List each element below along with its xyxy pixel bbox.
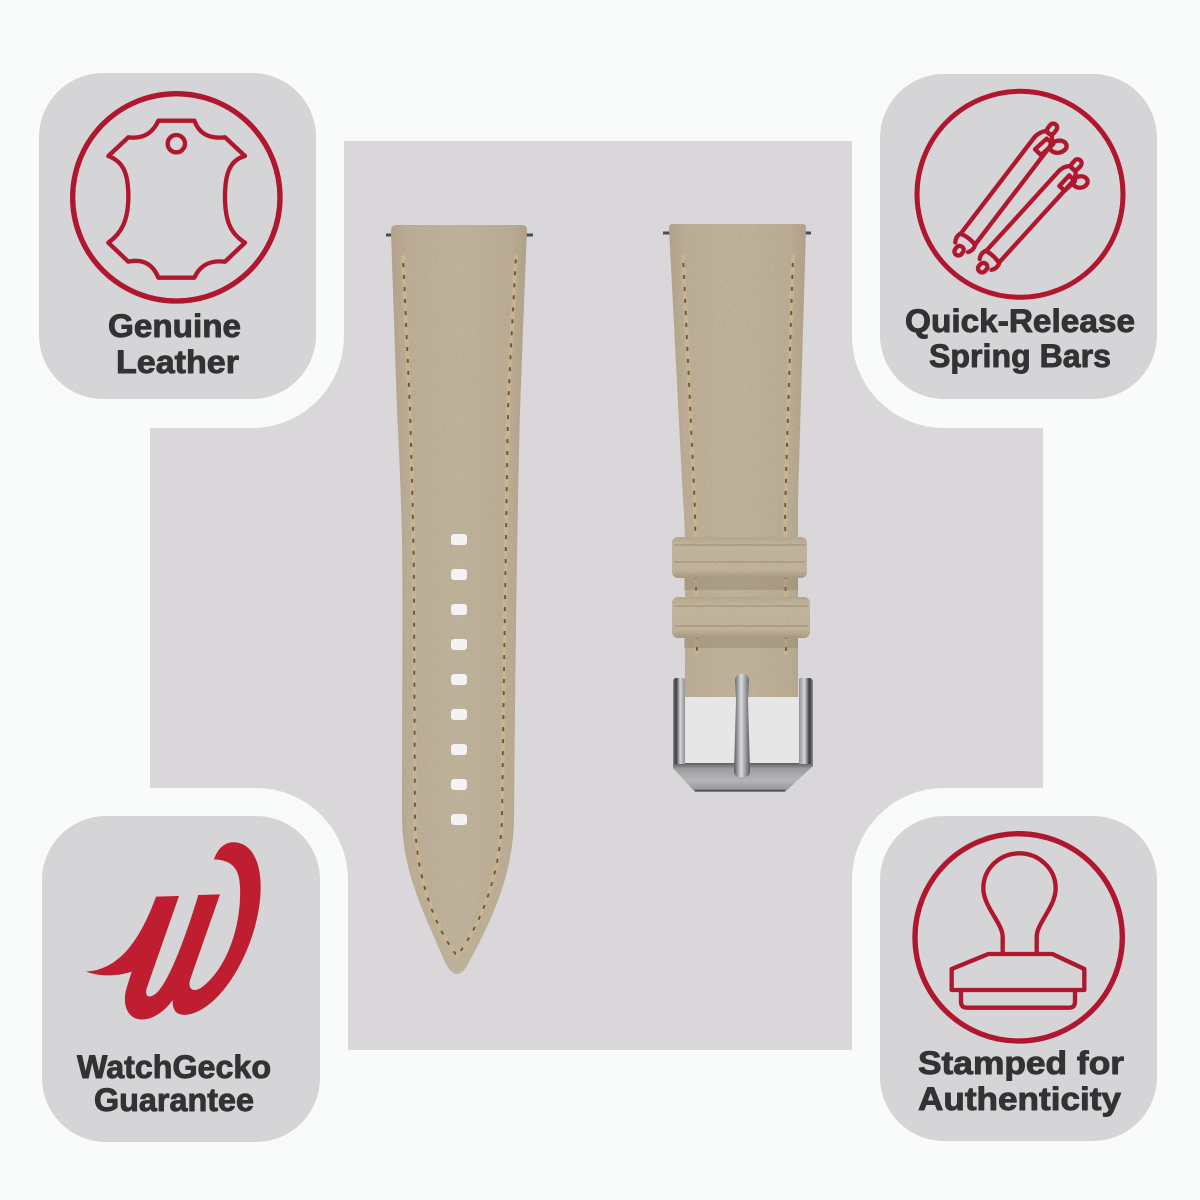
label: watchgecko guarantee: Guarantee bbox=[94, 1082, 254, 1118]
label: watchgecko guarantee: WatchGecko bbox=[77, 1049, 271, 1085]
short watch strap piece with buckle bbox=[663, 224, 813, 792]
long watch strap piece bbox=[386, 225, 533, 974]
label: quick-release spring bars: Spring Bars bbox=[929, 338, 1111, 374]
buckle holes bbox=[451, 534, 467, 825]
panel: stamped for authenticity bbox=[880, 816, 1157, 1141]
spring bar two bbox=[972, 154, 1088, 278]
spring bar one bbox=[948, 118, 1064, 261]
panel: genuine leather bbox=[39, 73, 316, 399]
buckle tongue bbox=[734, 674, 750, 777]
label: genuine leather: Leather bbox=[116, 344, 239, 380]
stitching bbox=[403, 255, 516, 956]
buckle right bar bbox=[799, 678, 813, 764]
buckle left bar bbox=[673, 678, 685, 764]
keeper shadow bbox=[684, 578, 798, 648]
strap keeper one bbox=[672, 537, 807, 578]
label: stamped for authenticity: Authenticity bbox=[918, 1081, 1121, 1117]
strap body bbox=[669, 224, 806, 697]
icon: leather hide bbox=[73, 94, 280, 301]
metal buckle bbox=[673, 678, 813, 792]
spring bar tips bbox=[386, 234, 533, 236]
icon: rubber stamp bbox=[915, 834, 1122, 1041]
panel: quick-release spring bars bbox=[880, 74, 1157, 399]
icon: spring bars bbox=[917, 91, 1123, 297]
stitching bbox=[683, 255, 793, 655]
icon: watchgecko W logo bbox=[86, 842, 261, 1019]
central backdrop panel bbox=[150, 141, 1043, 1050]
label: genuine leather: Genuine bbox=[108, 308, 241, 344]
panel: watchgecko guarantee bbox=[42, 816, 320, 1142]
card halo: top left bbox=[0, 40, 344, 428]
card halo: bottom left bbox=[0, 788, 348, 1176]
spring bar tips bbox=[663, 232, 811, 234]
label: quick-release spring bars: Quick-Release bbox=[905, 303, 1135, 339]
card halo: bottom right bbox=[852, 788, 1200, 1176]
strap keeper two bbox=[672, 597, 810, 638]
buckle bottom bar bbox=[673, 763, 813, 792]
label: stamped for authenticity: Stamped for bbox=[918, 1045, 1124, 1081]
strap body bbox=[391, 225, 527, 974]
card halo: top right bbox=[852, 40, 1200, 428]
buckle opening bbox=[685, 697, 799, 764]
